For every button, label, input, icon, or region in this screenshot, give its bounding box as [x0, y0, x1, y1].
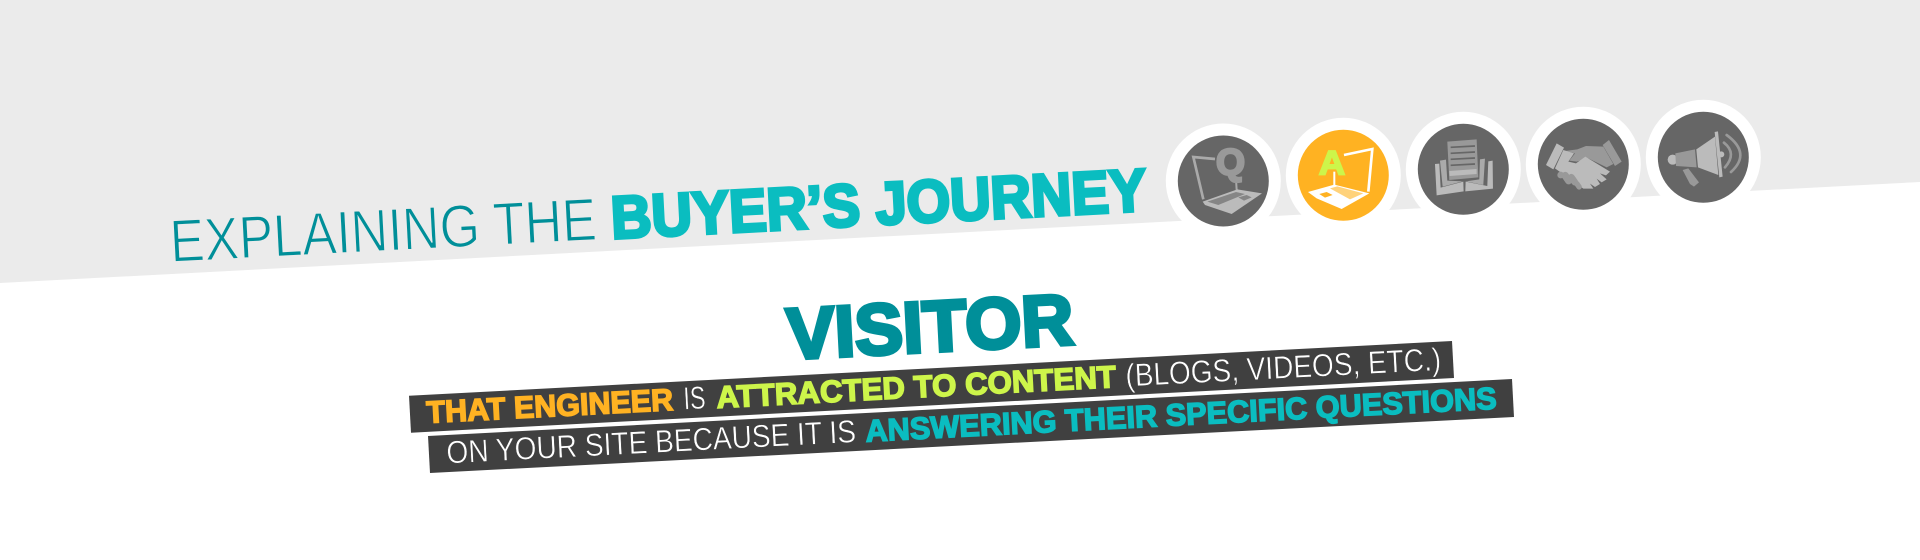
on your site: ON YOUR SITE BECAUSE IT IS — [445, 413, 857, 470]
stage icons row — [1166, 100, 1761, 238]
heading light part: EXPLAINING THE — [168, 186, 598, 275]
strip background 2 — [428, 379, 1514, 473]
answering their specific questions: ANSWERING THEIR SPECIFIC QUESTIONS — [865, 381, 1498, 449]
that engineer: THAT ENGINEER — [426, 382, 674, 430]
heading: explaining the buyer's journey — [168, 157, 1148, 275]
icon: megaphone — [1646, 100, 1761, 215]
icon: laptop with Q: Q — [1216, 141, 1245, 183]
icon: handshake — [1526, 107, 1641, 222]
icon: book with document — [1406, 112, 1521, 227]
strip background 1 — [409, 341, 1454, 433]
icon: laptop with Q — [1166, 124, 1281, 238]
icon: laptop with A (active): A — [1319, 144, 1345, 182]
blogs videos etc: (BLOGS, VIDEOS, ETC.) — [1124, 341, 1442, 393]
description strip line 1 — [409, 341, 1454, 433]
attracted to content: ATTRACTED TO CONTENT — [716, 359, 1117, 415]
description strip line 2 — [428, 379, 1514, 473]
is: IS — [682, 379, 706, 416]
stage title: visitor: VISITOR — [785, 280, 1075, 375]
heading bold part: BUYER’S JOURNEY — [609, 157, 1148, 251]
icon: laptop with A (active) — [1286, 118, 1401, 233]
grey slanted header band — [0, 0, 1920, 283]
